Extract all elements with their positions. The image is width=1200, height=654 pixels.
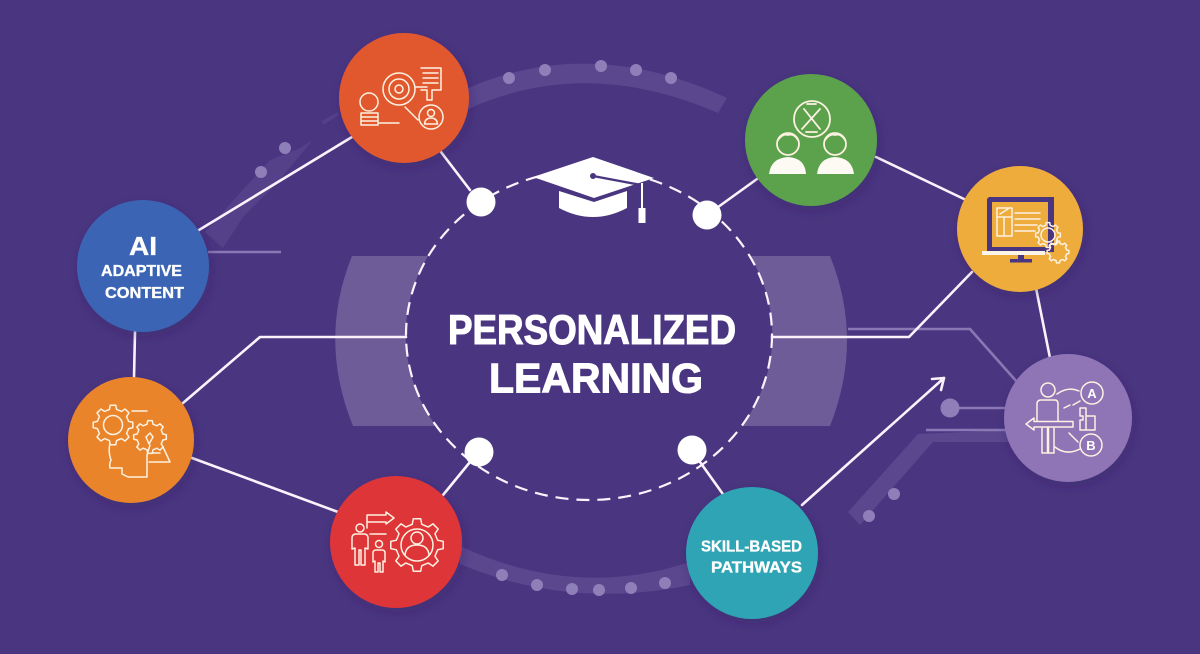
- node: skill-based pathways: PATHWAYS: [711, 560, 802, 576]
- node: yellow computer icon: [957, 166, 1083, 292]
- decorative bottom arc with dots: [460, 546, 690, 596]
- ring nodes: [464, 188, 722, 466]
- lavender connector lines: [208, 252, 1017, 430]
- node: skill-based pathways: SKILL-BASED: [701, 538, 802, 556]
- icon: person choosing A or B: A: [1087, 386, 1097, 401]
- title: PERSONALIZED: [448, 306, 736, 353]
- icon: head with gears: [93, 405, 170, 477]
- node: green collaboration icon: [745, 74, 877, 206]
- node: purple A/B choice icon: [1004, 354, 1132, 482]
- decorative top-left wedge with dots: [205, 112, 339, 248]
- dashed central ring: [406, 170, 772, 500]
- icon: person choosing A or B: [1026, 382, 1103, 456]
- node: AI adaptive content: ADAPTIVE: [101, 263, 182, 280]
- node: AI adaptive content: AI: [129, 231, 157, 261]
- icon: monitor with gears: [982, 197, 1069, 263]
- title: [448, 306, 736, 402]
- icon: person choosing A or B: B: [1086, 438, 1096, 453]
- icon: two learners with shared tools: [769, 101, 854, 174]
- icon: target and profile: [360, 68, 443, 129]
- node: crimson mentoring icon: [330, 476, 462, 608]
- icon: graduation cap: [533, 157, 654, 223]
- left translucent band: [335, 256, 436, 426]
- decorative top arc with dots: [466, 60, 727, 113]
- node: AI adaptive content: CONTENT: [105, 285, 184, 302]
- node: orange mind gears icon: [68, 377, 194, 503]
- right translucent band: [742, 256, 847, 426]
- white connector lines: [134, 137, 1050, 512]
- icon: people and profile gear: [352, 512, 443, 572]
- node: AI adaptive content: [77, 200, 209, 332]
- decorative lower-right band with dots: [848, 430, 1010, 525]
- title: LEARNING: [489, 354, 703, 402]
- node: orange-red target icon: [339, 33, 469, 163]
- arrow: skill-based pathways upward: [802, 378, 944, 505]
- node: skill-based pathways: [686, 487, 818, 619]
